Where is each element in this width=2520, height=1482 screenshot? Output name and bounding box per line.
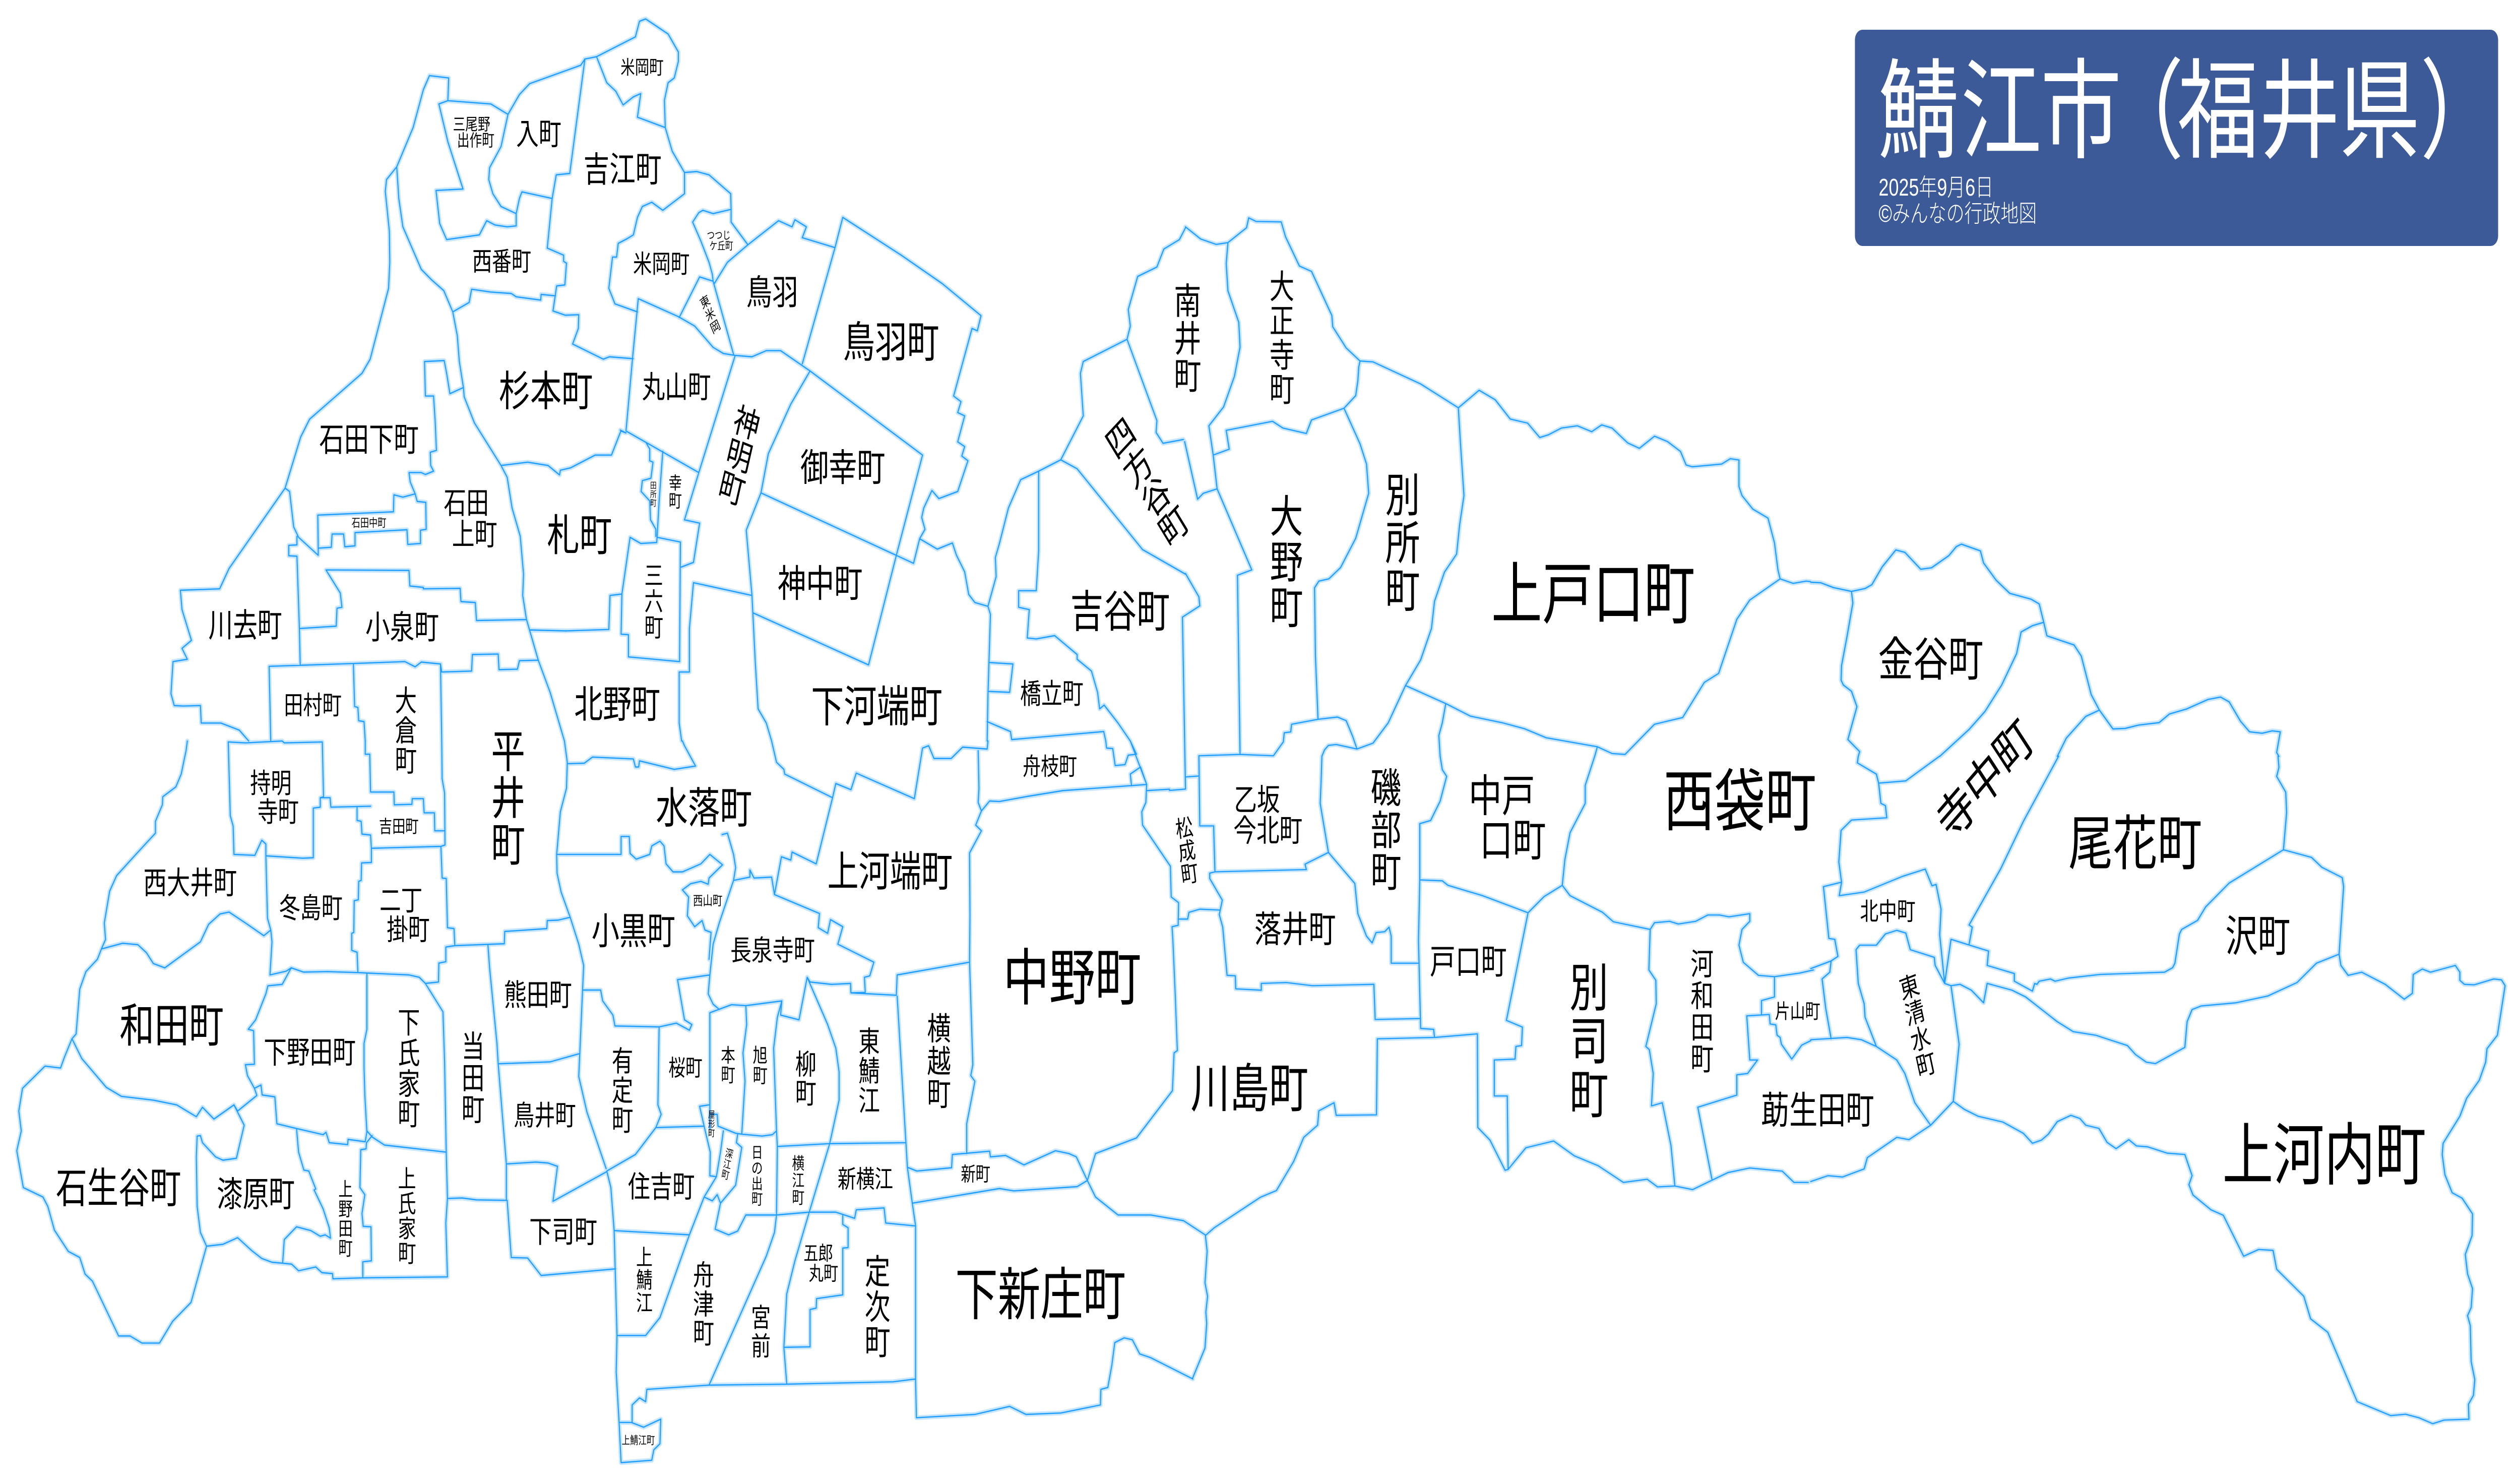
label: 田所町: 町 (650, 499, 657, 508)
label: 中戸口町: 中戸 (1469, 772, 1535, 821)
label: 下野田町: 下野田町 (264, 1036, 356, 1070)
label: 新横江: 新横江 (838, 1166, 893, 1193)
label: 横江町: 横 (792, 1154, 804, 1173)
label: 別所町: 所 (1385, 518, 1420, 570)
label: 当田町: 当 (462, 1030, 484, 1064)
label: 日の出町: 町 (751, 1191, 763, 1208)
label: 舟津町: 町 (693, 1318, 714, 1349)
label: 持明寺町: 持明 (250, 768, 292, 799)
label: 深江町: 深 (724, 1147, 734, 1160)
label: 南井町: 井 (1174, 319, 1201, 359)
label: 東清水町: 東 (1897, 969, 1922, 1005)
label: 三六町: 六 (644, 588, 663, 616)
label: 西山町: 西山町 (693, 893, 722, 908)
label: 幸町: 幸 (669, 473, 682, 493)
label: 本町: 本 (721, 1045, 735, 1067)
label: 深江町: 町 (721, 1168, 730, 1182)
label: 大正寺町: 大 (1270, 269, 1294, 306)
label: 北野町: 北野町 (574, 684, 660, 726)
label: 舟枝町: 舟枝町 (1023, 753, 1077, 780)
label: 米岡町 north: 米岡町 (620, 57, 664, 79)
label: 五郎丸町: 五郎 (803, 1243, 833, 1265)
label: 南井町: 南 (1174, 282, 1201, 322)
label: 柳町: 柳 (795, 1049, 816, 1081)
label: 別司町: 町 (1569, 1067, 1608, 1125)
label: 宮前: 前 (751, 1331, 771, 1361)
label: 下氏家町: 町 (398, 1098, 420, 1132)
label: 横江町: 江 (792, 1172, 804, 1190)
label: 磯部町: 町 (1371, 850, 1401, 896)
label: 石田上町: 石田 (444, 487, 489, 521)
label: 別所町: 別 (1385, 470, 1420, 522)
label: 横江町: 町 (792, 1189, 804, 1207)
label: 横越町: 町 (927, 1077, 951, 1112)
label: 丸山町: 丸山町 (642, 371, 711, 405)
label: 上河内町: 上河内町 (2222, 1118, 2426, 1194)
label: 神明町: 町 (715, 466, 748, 513)
label: 石田上町: 上町 (452, 518, 497, 552)
label: 四方谷町: 谷 (1136, 469, 1177, 526)
label: 川島町: 川島町 (1190, 1060, 1308, 1119)
label: 神明町: 明 (723, 433, 755, 480)
label: 上氏家町: 氏 (398, 1190, 416, 1217)
label: 下河端町: 下河端町 (811, 683, 942, 731)
label: 平井町: 井 (491, 773, 525, 824)
label: 平井町: 町 (491, 820, 525, 871)
label: 日の出町: 出 (751, 1176, 763, 1193)
label: 磯部町: 磯 (1371, 766, 1401, 812)
label: つつじケ丘町: つつじ (707, 229, 730, 241)
label: 御幸町: 御幸町 (800, 447, 885, 489)
label: 定次町: 定 (865, 1253, 890, 1291)
label: 東米岡: 米 (703, 305, 717, 324)
label: 大倉町: 町 (395, 745, 417, 777)
label: 下新庄町: 下新庄町 (955, 1264, 1126, 1327)
label: 石生谷町: 石生谷町 (56, 1165, 181, 1212)
label: 河和田町: 町 (1690, 1042, 1714, 1077)
label: 東鯖江: 鯖 (858, 1055, 880, 1087)
label: 橋立町: 橋立町 (1020, 678, 1084, 710)
label: 落井町: 落井町 (1254, 909, 1336, 950)
label: 日の出町: の (751, 1160, 763, 1177)
label: 上鯖江町: 上鯖江町 (622, 1435, 655, 1447)
label: 入町: 入町 (516, 118, 561, 152)
label: 漆原町: 漆原町 (217, 1175, 295, 1214)
label: 鳥井町: 鳥井町 (514, 1100, 576, 1131)
label: 東清水町: 水 (1908, 1021, 1933, 1057)
label: 上鯖江: 江 (636, 1291, 653, 1316)
label: 大倉町: 大 (395, 685, 417, 717)
label: 上河端町: 上河端町 (827, 848, 953, 895)
label: 持明寺町: 寺町 (257, 797, 299, 828)
label: 上野田町: 田 (338, 1219, 353, 1240)
label: 当田町: 田 (462, 1062, 484, 1096)
label: 中野町: 中野町 (1003, 944, 1141, 1013)
panel background (1855, 30, 2498, 246)
label: 川去町: 川去町 (209, 607, 282, 644)
label: 大野町: 大 (1270, 493, 1303, 542)
label: 和田町: 和田町 (119, 1000, 224, 1052)
label: 札町: 札町 (547, 512, 612, 560)
label: 松成町: 松 (1174, 814, 1194, 843)
date and credit: 2025年9月6日 (1879, 174, 1993, 201)
heading: 鯖江市（福井県） (1878, 51, 2501, 172)
label: 有定町: 有 (612, 1045, 633, 1077)
label: 三尾野出作町: 出作町 (457, 132, 494, 150)
label: 有定町: 町 (612, 1104, 633, 1137)
label: 寺中町: 寺中町 (1929, 709, 2042, 851)
label: 三六町: 三 (644, 562, 663, 590)
label: 西袋町: 西袋町 (1664, 764, 1816, 840)
label: 二丁掛町: 掛町 (387, 913, 430, 946)
label: 三六町: 町 (644, 614, 663, 642)
label: 五郎丸町: 丸町 (809, 1263, 838, 1285)
label: 中戸口町: 口町 (1480, 817, 1546, 866)
label: 吉谷町: 吉谷町 (1070, 588, 1170, 637)
label: 別所町: 町 (1385, 566, 1420, 618)
label: 住吉町: 住吉町 (628, 1171, 695, 1204)
label: 東清水町: 清 (1903, 995, 1927, 1031)
label: 上野田町: 町 (338, 1239, 353, 1260)
label: 上氏家町: 町 (398, 1240, 416, 1267)
label: 田村町: 田村町 (284, 691, 342, 720)
label: 上鯖江: 鯖 (636, 1268, 653, 1293)
label: 小泉町: 小泉町 (365, 609, 439, 646)
label: 杉本町: 杉本町 (499, 368, 593, 415)
label: 本町: 町 (721, 1065, 735, 1086)
label: 磯部町: 部 (1371, 808, 1401, 854)
label: 大正寺町: 正 (1270, 303, 1294, 340)
label: 上戸口町: 上戸口町 (1491, 557, 1695, 633)
label: 神中町: 神中町 (778, 563, 862, 605)
label: 石田下町: 石田下町 (319, 421, 419, 459)
label: 田所町: 田 (650, 481, 657, 490)
label: 大正寺町: 寺 (1270, 337, 1294, 375)
label: 平井町: 平 (491, 726, 525, 777)
label: 宮前: 宮 (751, 1303, 771, 1333)
label: 深江町: 江 (722, 1157, 732, 1171)
label: 上氏家町: 上 (398, 1165, 416, 1192)
label: 大野町: 町 (1270, 584, 1303, 633)
label: 莇生田町: 莇生田町 (1761, 1090, 1874, 1132)
label: 大倉町: 倉 (395, 715, 417, 747)
label: 横越町: 越 (927, 1044, 951, 1080)
label: 有定町: 定 (612, 1075, 633, 1107)
label: 幸町: 町 (669, 491, 682, 511)
label: 旭町: 旭 (753, 1045, 768, 1067)
label: 四方谷町: 四 (1100, 410, 1142, 467)
label: 松成町: 町 (1179, 859, 1200, 889)
label: 上野田町: 野 (338, 1199, 353, 1220)
label: つつじケ丘町: ケ丘町 (710, 240, 733, 252)
title panel (1855, 30, 2501, 246)
label: 河和田町: 和 (1690, 979, 1714, 1013)
label: 吉江町: 吉江町 (584, 150, 661, 189)
label: 石田中町: 石田中町 (352, 517, 386, 530)
label: 西大井町: 西大井町 (143, 865, 237, 901)
label: 上氏家町: 家 (398, 1215, 416, 1242)
label: 別司町: 司 (1569, 1013, 1608, 1071)
label: 東鯖江: 東 (858, 1025, 880, 1058)
label: 乙坂今北町: 乙坂 (1234, 783, 1280, 818)
label: 桜町: 桜町 (668, 1056, 703, 1081)
label: 定次町: 町 (865, 1324, 890, 1362)
label: 屋形町: 屋 (708, 1110, 715, 1120)
label: 別司町: 別 (1569, 960, 1608, 1018)
label: 下氏家町: 氏 (398, 1037, 420, 1071)
label: 横越町: 横 (927, 1011, 951, 1047)
label: 東米岡: 東 (698, 292, 712, 312)
label: 屋形町: 形 (708, 1119, 715, 1129)
label: 田所町: 所 (650, 490, 657, 500)
label: 片山町: 片山町 (1775, 1001, 1820, 1023)
label: 乙坂今北町: 今北町 (1233, 814, 1302, 848)
label: 当田町: 町 (462, 1093, 484, 1128)
label: 下氏家町: 下 (398, 1007, 420, 1040)
label: 河和田町: 田 (1690, 1011, 1714, 1045)
label: 屋形町: 町 (708, 1129, 715, 1139)
label: 二丁掛町: 二丁 (380, 884, 422, 916)
date and credit: ©みんなの行政地図 (1879, 200, 2037, 227)
label: 吉田町: 吉田町 (379, 817, 418, 837)
label: 鳥羽: 鳥羽 (746, 273, 798, 312)
label: 舟津町: 津 (693, 1289, 714, 1321)
label: 鳥羽町: 鳥羽町 (843, 319, 939, 366)
label: 定次町: 次 (865, 1288, 890, 1327)
label: 熊田町: 熊田町 (504, 979, 572, 1013)
label: 戸口町: 戸口町 (1430, 943, 1507, 981)
label: 三尾野出作町: 三尾野 (453, 116, 490, 134)
label: 新町: 新町 (961, 1164, 990, 1186)
label: 河和田町: 河 (1690, 948, 1714, 982)
label: 東鯖江: 江 (858, 1084, 880, 1117)
label: 大正寺町: 町 (1270, 372, 1294, 409)
label: 金谷町: 金谷町 (1878, 634, 1983, 686)
label: 小黒町: 小黒町 (592, 910, 675, 952)
label: 四方谷町: 方 (1118, 440, 1160, 497)
label: 日の出町: 日 (751, 1144, 763, 1161)
label: 南井町: 町 (1174, 356, 1201, 397)
label: 柳町: 町 (795, 1078, 816, 1110)
label: 上野田町: 上 (338, 1180, 353, 1201)
label: 松成町: 成 (1177, 836, 1197, 866)
label: 水落町: 水落町 (656, 784, 752, 832)
label: 米岡町: 米岡町 (633, 251, 689, 278)
label: 四方谷町: 町 (1154, 499, 1195, 555)
label: 舟津町: 舟 (693, 1260, 714, 1291)
label: 旭町: 町 (753, 1066, 768, 1087)
label: 神明町: 神 (730, 400, 763, 447)
label: 長泉寺町: 長泉寺町 (730, 935, 815, 966)
label: 尾花町: 尾花町 (2068, 812, 2202, 878)
label: 沢町: 沢町 (2225, 912, 2290, 961)
label: 北中町: 北中町 (1860, 898, 1916, 925)
label: 上鯖江: 上 (636, 1246, 653, 1270)
label: 東清水町: 町 (1914, 1047, 1938, 1083)
label: 冬島町: 冬島町 (279, 893, 343, 924)
label: 大野町: 野 (1270, 538, 1303, 588)
label: 東米岡: 岡 (708, 317, 722, 336)
label: 下氏家町: 家 (398, 1068, 420, 1101)
label: 西番町: 西番町 (472, 246, 531, 276)
label: 下司町: 下司町 (529, 1216, 597, 1250)
